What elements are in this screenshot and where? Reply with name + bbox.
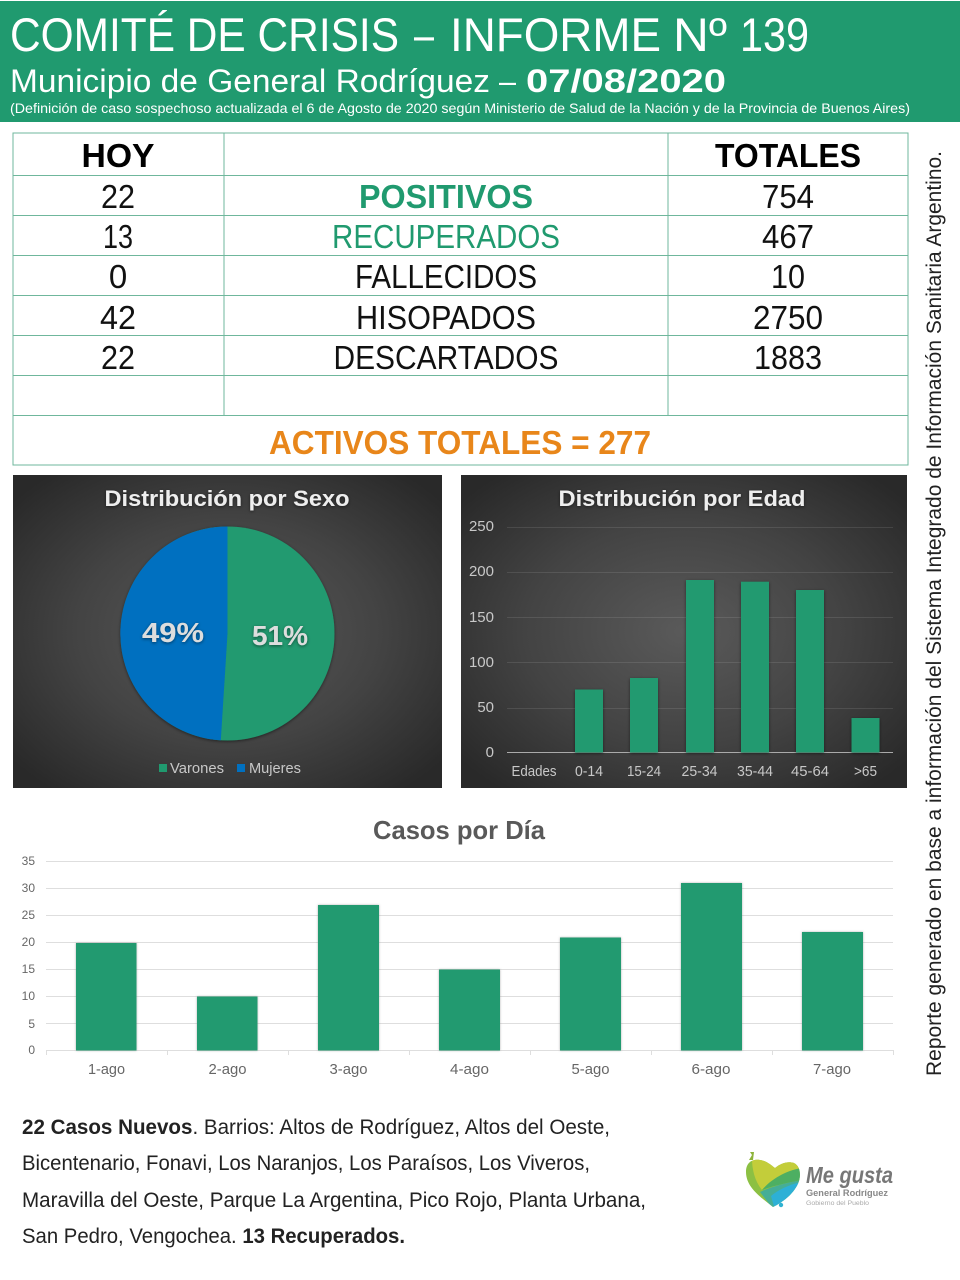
x axis labels: 0-14 [575, 763, 603, 780]
row labels: HISOPADOS [356, 299, 536, 336]
heading: Distribución por Edad [558, 486, 806, 511]
legend: Varones [170, 760, 224, 777]
title: COMITÉ DE CRISIS [10, 8, 399, 61]
heading: Distribución por Sexo [104, 486, 350, 511]
subtitle with date: 07/08/2020 [526, 63, 726, 99]
total values: 467 [762, 218, 814, 255]
row labels: RECUPERADOS [332, 218, 560, 255]
row labels: FALLECIDOS [355, 258, 537, 295]
x axis labels: 25-34 [682, 763, 718, 780]
percentage labels: 49% [142, 617, 204, 648]
today values: 22 [101, 178, 135, 215]
percentage labels [142, 617, 308, 651]
summary table [13, 133, 908, 465]
total values [753, 178, 823, 376]
y axis labels: 50 [477, 699, 494, 716]
title: 139 [740, 8, 809, 61]
header banner [0, 1, 960, 122]
y axis labels: 10 [22, 989, 35, 1003]
title: INFORME [450, 8, 661, 61]
age bars [575, 580, 880, 752]
today values: 13 [103, 218, 133, 255]
total values: 10 [771, 258, 805, 295]
row labels: DESCARTADOS [334, 339, 558, 376]
total values: 2750 [753, 299, 823, 336]
neighbourhoods text block: San Pedro, Vengochea. 13 Recuperados. [22, 1225, 405, 1248]
row labels [332, 178, 560, 376]
neighbourhoods text block: Maravilla del Oeste, Parque La Argentina, Pico Rojo, Planta Urbana, [22, 1189, 646, 1212]
neighbourhoods text block: 22 Casos Nuevos. Barrios: Altos de Rodríguez, Altos del Oeste, [22, 1116, 610, 1139]
y axis labels: 5 [28, 1017, 35, 1031]
row labels: POSITIVOS [359, 178, 533, 215]
pie chart [120, 526, 334, 740]
total values: 1883 [754, 339, 822, 376]
y axis labels [22, 854, 35, 1057]
today values: 22 [101, 339, 135, 376]
y axis labels: 0 [486, 744, 494, 761]
case definition note: (Definición de caso sospechoso actualizada el 6 de Agosto de 2020 según Ministerio de Salud de la Nación y de la Provincia de Buenos Aires) [10, 100, 910, 116]
legend: Mujeres [249, 760, 301, 777]
today values [100, 178, 136, 376]
x axis labels: 35-44 [737, 763, 773, 780]
title: Nº [673, 8, 727, 61]
wordmark: Me gusta [806, 1162, 893, 1188]
x axis labels: 7-ago [813, 1061, 851, 1078]
panel: distribution by age [461, 475, 907, 788]
panel: distribution by sex [13, 475, 442, 788]
icon: heart [746, 1152, 800, 1208]
y axis labels: 35 [22, 854, 35, 868]
x axis labels: 1-ago [88, 1061, 125, 1078]
y axis labels: 100 [469, 654, 494, 671]
x axis labels: 2-ago [208, 1061, 246, 1078]
neighbourhoods text block: Bicentenario, Fonavi, Los Naranjos, Los Paraísos, Los Viveros, [22, 1152, 590, 1175]
subtitle with date: Municipio de General Rodríguez [10, 63, 490, 99]
logo: Me gusta General Rodríguez: General Rodríguez [806, 1188, 889, 1198]
x axis labels: Edades [512, 763, 556, 780]
y axis labels: 0 [28, 1043, 35, 1057]
y axis labels: 20 [22, 935, 35, 949]
x axis labels: >65 [854, 763, 877, 780]
today values: 0 [109, 258, 127, 295]
y axis labels: 200 [469, 563, 494, 580]
vertical source note: Reporte generado en base a información del Sistema Integrado de Información Sanitaria Argentino. [923, 151, 946, 1076]
panel: cases per day [22, 815, 894, 1078]
y axis labels: 25 [22, 908, 35, 922]
logo: Me gusta General Rodríguez [744, 1152, 893, 1210]
x axis labels: 3-ago [330, 1061, 368, 1078]
x axis labels: 5-ago [572, 1061, 610, 1078]
today values: 42 [100, 299, 136, 336]
logo: Me gusta General Rodríguez: Gobierno del Pueblo [806, 1200, 869, 1207]
x axis labels: 4-ago [450, 1061, 489, 1078]
subtitle with date: – [499, 63, 516, 99]
x axis labels: 15-24 [627, 763, 661, 780]
column headers [82, 137, 861, 174]
x axis labels [88, 1061, 851, 1078]
legend [159, 760, 301, 777]
column headers: HOY [82, 137, 154, 174]
title: – [414, 8, 435, 61]
total values: 754 [762, 178, 814, 215]
y axis labels [469, 518, 494, 761]
x axis labels [512, 763, 877, 780]
heading: Casos por Día [373, 815, 546, 845]
percentage labels: 51% [252, 620, 308, 651]
subtitle with date [10, 63, 726, 99]
daily bars [76, 883, 863, 1050]
title [10, 8, 809, 61]
active total: ACTIVOS TOTALES = 277 [269, 424, 651, 461]
neighbourhoods text block [22, 1116, 646, 1248]
y axis labels: 150 [469, 609, 494, 626]
y axis labels: 15 [22, 962, 35, 976]
column headers: TOTALES [715, 137, 861, 174]
x axis labels: 6-ago [692, 1061, 730, 1078]
x axis labels: 45-64 [791, 763, 829, 780]
y axis labels: 250 [469, 518, 494, 535]
y axis labels: 30 [22, 881, 35, 895]
